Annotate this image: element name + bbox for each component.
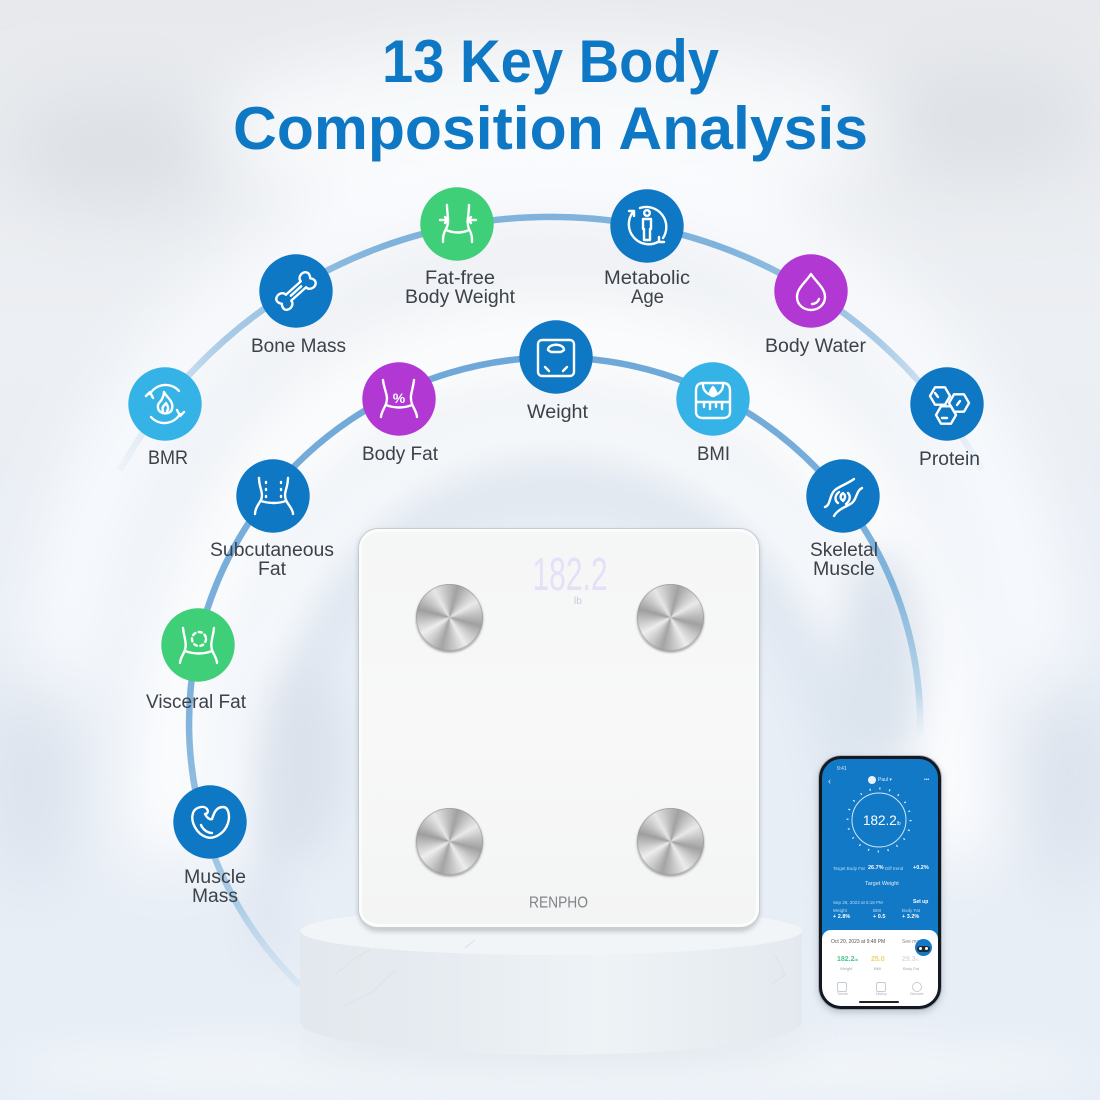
label: Fat-free Body Weight: Fat-free [425, 268, 495, 289]
label: Skeletal Muscle: Skeletal [810, 540, 878, 561]
app stats: Target Weight [865, 881, 899, 887]
app white card: Oct 20, 2023 at 9:48 PM [831, 939, 885, 945]
label: Metabolic Age: Metabolic [604, 268, 690, 289]
app stats: Weight [833, 908, 847, 913]
app stats: 26.7% [868, 865, 884, 871]
label: Protein: Protein [919, 449, 980, 470]
electrode: bottom left [416, 808, 483, 875]
app white card: BMI [874, 966, 881, 971]
app stats: BMI [873, 908, 881, 913]
app stats: + 3.2% [902, 914, 919, 920]
label: Body Fat: Body Fat [362, 444, 439, 465]
label: Muscle Mass: Mass [192, 886, 238, 907]
electrode: bottom right [637, 808, 704, 875]
app white card: Discover [910, 992, 924, 996]
icon: Body Water [774, 254, 848, 328]
app white card: Body Fat [903, 966, 919, 971]
arc: inner ring [189, 358, 555, 985]
app white card: See more [902, 939, 924, 945]
icon: BMR [128, 367, 202, 441]
label: Bone Mass: Bone Mass [251, 336, 346, 357]
phone with app [819, 756, 941, 1009]
app stats: Diff trend [885, 866, 903, 871]
icon: BMI [676, 362, 750, 436]
label: Visceral Fat: Visceral Fat [146, 692, 247, 713]
brand logo: RENPHO [529, 894, 588, 912]
icon: Body Fat: % [393, 390, 406, 406]
label: Fat-free Body Weight: Body Weight [405, 287, 516, 308]
label: Fat-free Body Weight [405, 268, 516, 308]
scale [358, 528, 760, 930]
label: BMI: BMI [697, 444, 730, 465]
icon: Metabolic Age [610, 189, 684, 263]
icon: Muscle Mass [173, 785, 247, 859]
icon: Body Fat [362, 362, 436, 436]
app status bar and user [828, 766, 930, 786]
weight gauge [846, 788, 912, 852]
app white card: Trends [837, 992, 848, 996]
app status bar and user: ‹ [828, 776, 831, 786]
electrode: top right [637, 584, 704, 651]
label: Metabolic Age [604, 268, 690, 308]
label: Subcutaneous Fat: Subcutaneous [210, 540, 334, 561]
app white card: 182.2lb [837, 956, 858, 963]
title: 13 Key Body [382, 28, 720, 95]
icon: Protein [910, 367, 984, 441]
title [233, 28, 868, 162]
app white card: 29.3% [902, 956, 919, 963]
icon: Fat-free Body Weight [420, 187, 494, 261]
label: Skeletal Muscle: Muscle [813, 559, 875, 580]
app white card: Weight [840, 966, 852, 971]
title: Composition Analysis [233, 95, 868, 162]
label: Metabolic Age: Age [631, 287, 664, 308]
app status bar and user: Paul ▾ [878, 777, 892, 783]
app stats: Body Fat [902, 908, 920, 913]
app mascot [915, 939, 932, 956]
app stats: Sep 28, 2023 at 5:18 PM [833, 900, 883, 905]
app stats: +0.2% [913, 865, 929, 871]
label: Body Water: Body Water [765, 336, 867, 357]
weight gauge: 182.2lb [863, 813, 901, 828]
scale display: lb [574, 596, 582, 607]
icon: Subcutaneous Fat [236, 459, 310, 533]
icon: Weight [519, 320, 593, 394]
app white card [822, 930, 938, 1006]
electrode: top left [416, 584, 483, 651]
label: BMR: BMR [148, 448, 188, 469]
app stats: Set up [913, 899, 928, 905]
arc: inner ring right [554, 358, 920, 735]
label: Skeletal Muscle [810, 540, 878, 580]
arc: outer ring [120, 217, 982, 470]
label: Subcutaneous Fat [210, 540, 334, 580]
label: Muscle Mass: Muscle [184, 867, 246, 888]
app stats [833, 865, 929, 920]
icon: Visceral Fat [161, 608, 235, 682]
app white card: History [876, 992, 887, 996]
app status bar and user: ••• [924, 777, 929, 783]
label: Weight: Weight [527, 402, 589, 423]
icon: Bone Mass [259, 254, 333, 328]
app stats: Target Body Fat [833, 866, 865, 871]
app stats: + 2.8% [833, 914, 850, 920]
icon: Skeletal Muscle [806, 459, 880, 533]
label: Muscle Mass [184, 867, 246, 907]
app status bar and user: 9:41 [837, 766, 847, 772]
label: Subcutaneous Fat: Fat [258, 559, 287, 580]
app white card: 25.0 [871, 956, 885, 963]
app stats: + 0.5 [873, 914, 885, 920]
marble podium [289, 907, 813, 1066]
